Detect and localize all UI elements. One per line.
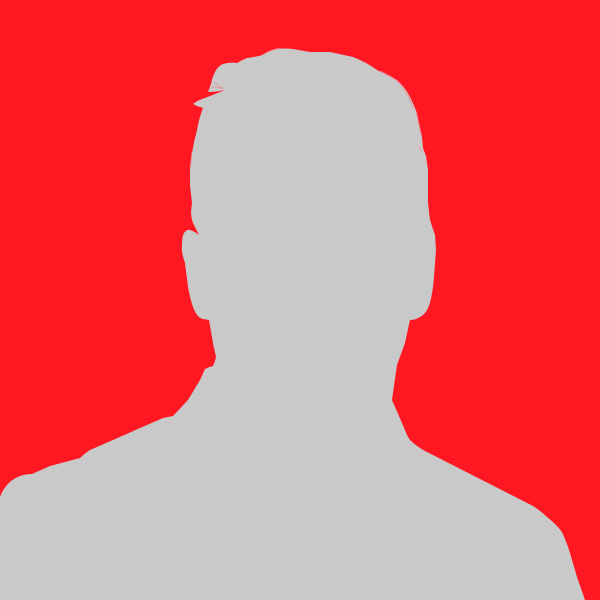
hair wisps: [190, 48, 422, 168]
